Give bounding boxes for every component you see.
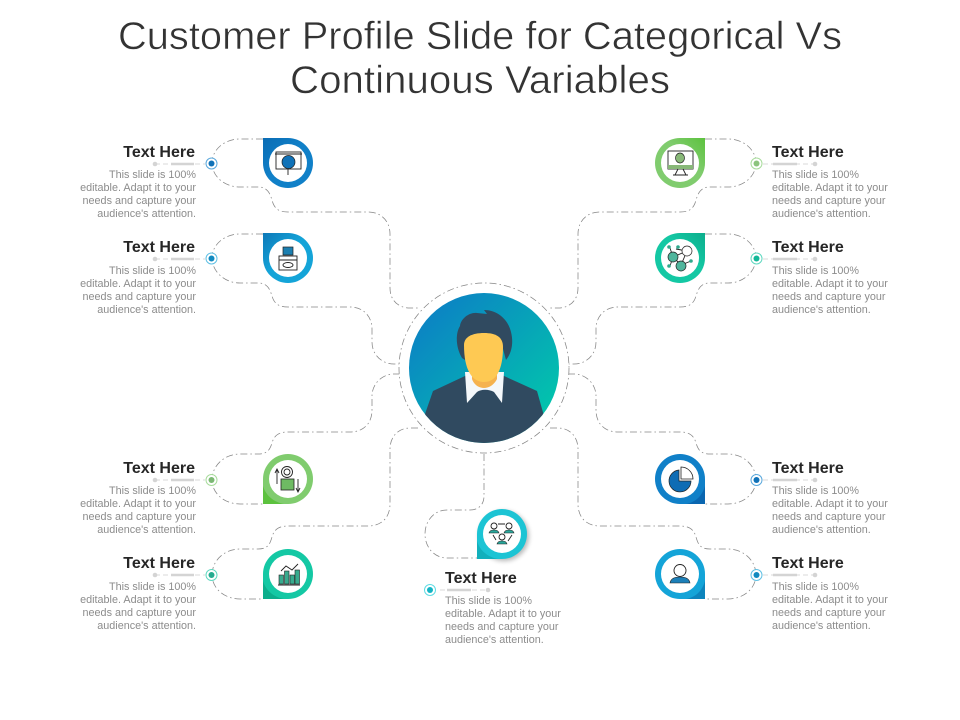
icon: pie chart <box>655 454 705 504</box>
text block: This slide is 100% <box>109 265 196 277</box>
text block <box>440 570 561 646</box>
node <box>206 570 217 580</box>
text block: needs and capture your <box>445 621 559 633</box>
node <box>206 253 217 264</box>
text block: Text Here <box>772 144 844 161</box>
text block: audience's attention. <box>97 620 196 632</box>
text block: editable. Adapt it to your <box>80 498 196 510</box>
text block: needs and capture your <box>772 195 886 207</box>
text block: needs and capture your <box>772 607 886 619</box>
text block: Text Here <box>772 555 844 572</box>
node <box>751 253 762 264</box>
text block: Text Here <box>445 570 517 587</box>
title: Customer Profile Slide for Categorical Vs <box>118 15 842 58</box>
text block: editable. Adapt it to your <box>772 182 888 194</box>
text block: This slide is 100% <box>772 581 859 593</box>
text block: editable. Adapt it to your <box>80 594 196 606</box>
text block: editable. Adapt it to your <box>445 608 561 620</box>
text block: editable. Adapt it to your <box>80 182 196 194</box>
item: bottom left 2 <box>80 549 313 632</box>
text block <box>80 239 205 316</box>
icon: money box with arrows <box>263 454 313 504</box>
item: bottom right 2 <box>655 549 888 632</box>
text block: This slide is 100% <box>772 169 859 181</box>
title: Continuous Variables <box>290 59 670 102</box>
text block <box>80 460 205 536</box>
node <box>424 584 436 596</box>
text block: editable. Adapt it to your <box>80 278 196 290</box>
node <box>751 570 762 580</box>
text block: needs and capture your <box>772 291 886 303</box>
text block: Text Here <box>772 239 844 256</box>
title <box>118 15 842 102</box>
node <box>206 474 217 486</box>
text block: audience's attention. <box>445 634 544 646</box>
text block <box>80 555 205 632</box>
item: top left 1 <box>80 138 313 220</box>
text block: This slide is 100% <box>109 485 196 497</box>
text block: needs and capture your <box>83 607 196 619</box>
text block: needs and capture your <box>83 195 196 207</box>
node <box>206 158 217 169</box>
item: top right 1 <box>655 138 888 220</box>
text block: This slide is 100% <box>772 485 859 497</box>
icon: monitor with database <box>655 138 705 188</box>
text block: This slide is 100% <box>772 265 859 277</box>
text block: audience's attention. <box>772 304 871 316</box>
connector lines <box>212 139 756 599</box>
text block: audience's attention. <box>97 304 196 316</box>
item: bottom left 1 <box>80 454 313 536</box>
text block: audience's attention. <box>97 524 196 536</box>
text block: editable. Adapt it to your <box>772 498 888 510</box>
text block: Text Here <box>123 555 195 572</box>
icon: presentation board <box>263 138 313 188</box>
item: top right 2 <box>655 233 888 316</box>
icon: people network <box>655 233 705 283</box>
icon: database card <box>263 233 313 283</box>
text block: editable. Adapt it to your <box>772 278 888 290</box>
central customer avatar <box>399 283 569 453</box>
text block: audience's attention. <box>772 208 871 220</box>
text block: Text Here <box>772 460 844 477</box>
node <box>751 474 762 486</box>
icon: person <box>655 549 705 599</box>
node <box>751 158 762 169</box>
text block: needs and capture your <box>83 511 196 523</box>
text block: Text Here <box>123 144 195 161</box>
text block <box>763 239 888 316</box>
text block: needs and capture your <box>772 511 886 523</box>
text block: This slide is 100% <box>445 595 532 607</box>
text block <box>80 144 205 220</box>
text block <box>763 144 888 220</box>
text block: Text Here <box>123 460 195 477</box>
text block: needs and capture your <box>83 291 196 303</box>
text block: editable. Adapt it to your <box>772 594 888 606</box>
icon: bar and line chart <box>263 549 313 599</box>
text block: Text Here <box>123 239 195 256</box>
item: bottom right 1 <box>655 454 888 536</box>
text block <box>763 460 888 536</box>
text block: This slide is 100% <box>109 169 196 181</box>
text block: audience's attention. <box>772 620 871 632</box>
text block <box>763 555 888 632</box>
icon: team cycle <box>477 509 529 561</box>
text block: audience's attention. <box>772 524 871 536</box>
item: bottom center <box>424 509 561 646</box>
text block: audience's attention. <box>97 208 196 220</box>
item: top left 2 <box>80 233 313 316</box>
text block: This slide is 100% <box>109 581 196 593</box>
